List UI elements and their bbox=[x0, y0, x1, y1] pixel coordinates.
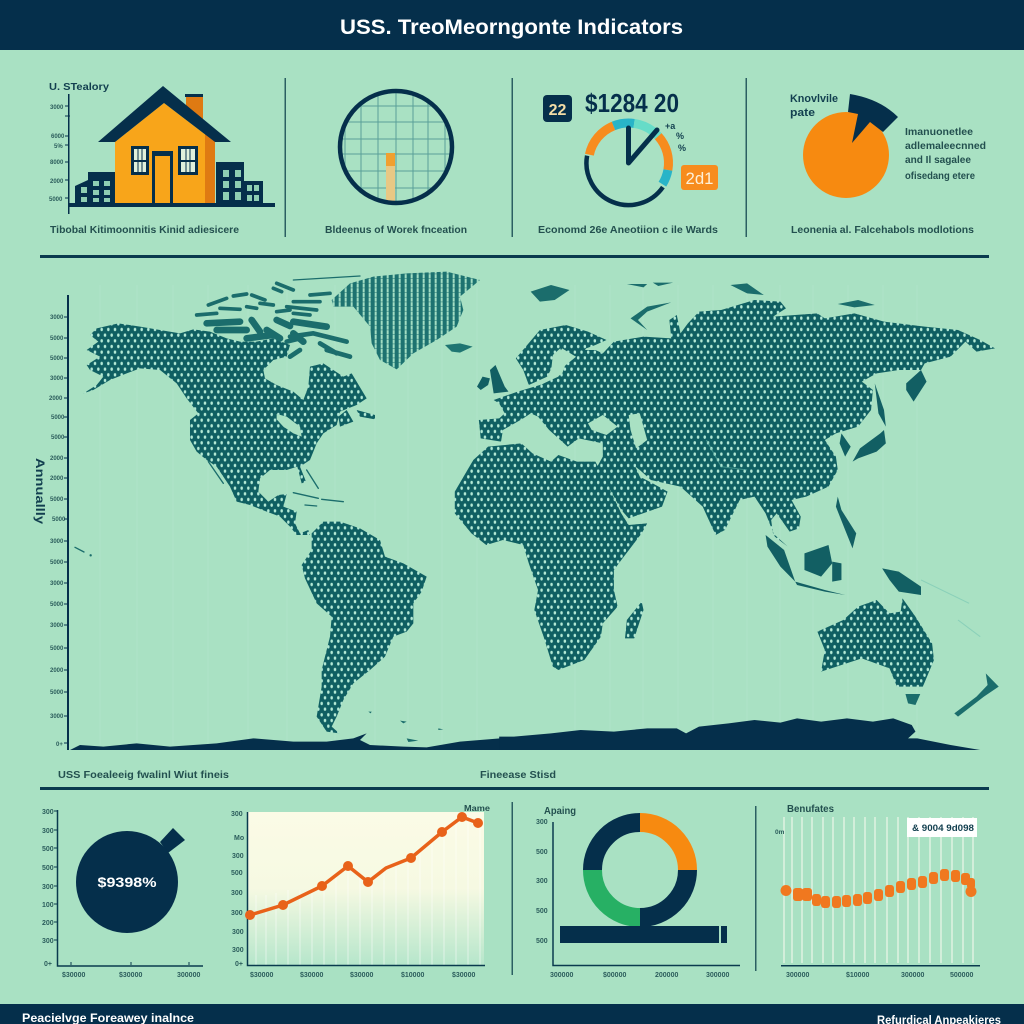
panel: line chart: $30000 bbox=[350, 972, 373, 979]
panel: donut chart bbox=[536, 806, 740, 979]
panel: gauge: 22 bbox=[549, 102, 566, 119]
map caption right: Fineease Stisd bbox=[480, 769, 556, 781]
panel: pie chart: Imanuonetlee bbox=[905, 126, 973, 138]
divider bbox=[512, 802, 513, 975]
panel: dotted trend: & 9004 9d098 bbox=[912, 823, 974, 833]
panel: dotted trend: 300000 bbox=[786, 972, 809, 979]
map axis: 3000 bbox=[50, 581, 64, 587]
panel: dotted trend: 0m bbox=[775, 829, 785, 836]
panel: donut chart: 300 bbox=[536, 878, 548, 885]
Arctic islands bbox=[75, 276, 360, 552]
panel: gauge: $1284 20 bbox=[585, 88, 679, 118]
panel: gauge: 2d1 bbox=[686, 169, 714, 188]
panel: gauge bbox=[543, 88, 718, 205]
map axis: 5000 bbox=[52, 517, 66, 523]
panel: dotted trend bbox=[775, 804, 980, 979]
map axis: 2000 bbox=[50, 476, 64, 482]
panel: circle stat: 300 bbox=[42, 884, 54, 891]
caption: gauge panel: Economd 26e Aneotiion c ile Wards bbox=[538, 224, 718, 236]
panel: dotted trend: $10000 bbox=[846, 972, 869, 979]
panel: gauge: % bbox=[678, 143, 686, 153]
panel: donut chart: 300000 bbox=[550, 972, 573, 979]
map axis: 5000 bbox=[50, 560, 64, 566]
panel: circle stat: $9398% bbox=[98, 874, 157, 890]
Greenland bbox=[332, 272, 480, 369]
panel: donut chart: 300000 bbox=[706, 972, 729, 979]
panel: circle stat: 300000 bbox=[177, 972, 200, 979]
map axis: 2000 bbox=[50, 456, 64, 462]
caption: pie panel: Leonenia al. Falcehabols modlotions bbox=[791, 224, 974, 236]
panel: house indicator bbox=[49, 81, 275, 214]
panel: line chart: 300 bbox=[231, 890, 243, 897]
panel: line chart: $30000 bbox=[250, 972, 273, 979]
panel: line chart: $30000 bbox=[300, 972, 323, 979]
caption: grid panel: Bldeenus of Worek fnceation bbox=[325, 224, 467, 236]
panel: house indicator: 3000 bbox=[50, 105, 64, 111]
panel: house indicator: 5% bbox=[54, 144, 63, 150]
panel: line chart: Mo bbox=[234, 835, 244, 842]
panel: line chart: $10000 bbox=[401, 972, 424, 979]
panel: dotted trend: 300000 bbox=[901, 972, 924, 979]
map axis: 5000 bbox=[51, 435, 65, 441]
Americas, Greenland, Arctic islands bbox=[70, 272, 500, 750]
panel: donut chart: 300 bbox=[536, 819, 548, 826]
panel: pie chart: pate bbox=[790, 107, 815, 119]
panel: dotted trend: Benufates bbox=[787, 804, 834, 815]
map axis: 3000 bbox=[50, 714, 64, 720]
panel: dotted trend: 500000 bbox=[950, 972, 973, 979]
panel: donut chart: 500 bbox=[536, 849, 548, 856]
panel: house indicator: 8000 bbox=[50, 160, 64, 166]
map axis: 3000 bbox=[50, 539, 64, 545]
map axis: 3000 bbox=[50, 376, 64, 382]
panel: circle stat: 500 bbox=[42, 865, 54, 872]
panel: circle stat: $30000 bbox=[119, 972, 142, 979]
panel: pie chart: adlemaleecnned bbox=[905, 140, 986, 152]
panel: donut chart: Apaing bbox=[544, 806, 576, 817]
panel: gauge: +a bbox=[665, 121, 676, 131]
divider bbox=[284, 78, 286, 237]
map axis: 3000 bbox=[50, 623, 64, 629]
Madagascar bbox=[625, 602, 644, 638]
panel: grid circle bbox=[340, 90, 452, 205]
map axis: 5000 bbox=[50, 602, 64, 608]
panel: circle stat bbox=[42, 809, 203, 979]
panel: circle stat: 0+ bbox=[44, 961, 52, 968]
rule bbox=[40, 255, 989, 258]
divider bbox=[746, 78, 747, 237]
panel: line chart bbox=[231, 804, 491, 979]
divider bbox=[755, 806, 756, 971]
header banner bbox=[0, 0, 1024, 50]
panel: line chart: 300 bbox=[232, 947, 244, 954]
Australia bbox=[817, 598, 934, 687]
panel: donut chart: $00000 bbox=[603, 972, 626, 979]
panel: line chart: 300 bbox=[231, 811, 243, 818]
panel: pie chart bbox=[790, 93, 986, 198]
panel: line chart: 500 bbox=[231, 870, 243, 877]
panel: donut chart: 500 bbox=[536, 938, 548, 945]
panel: line chart: Mame bbox=[464, 804, 491, 813]
map caption left: USS Foealeeig fwalinl Wiut fineis bbox=[58, 769, 229, 781]
divider bbox=[512, 78, 513, 237]
panel: donut chart: 200000 bbox=[655, 972, 678, 979]
map axis: 5000 bbox=[50, 690, 64, 696]
map axis: 5000 bbox=[50, 497, 64, 503]
panel: house indicator: 2000 bbox=[50, 179, 64, 185]
panel: line chart: 300 bbox=[232, 929, 244, 936]
map axis: 2000 bbox=[50, 668, 64, 674]
panel: house indicator: 5000 bbox=[49, 197, 63, 203]
map axis: 0+ bbox=[56, 742, 63, 748]
panel: pie chart: ofisedang etere bbox=[905, 170, 975, 182]
panel: line chart: 0+ bbox=[235, 961, 243, 968]
map axis: 2000 bbox=[49, 396, 63, 402]
Eurasia, Africa, Oceania bbox=[455, 283, 999, 750]
panel: line chart: 300 bbox=[232, 853, 244, 860]
Asian islands bbox=[766, 370, 927, 595]
header banner: USS. TreoMeorngonte Indicators bbox=[340, 16, 683, 39]
map axis: 5000 bbox=[50, 336, 64, 342]
caption: house panel: Tibobal Kitimoonnitis Kinid adiesicere bbox=[50, 224, 239, 236]
panel: line chart: $30000 bbox=[452, 972, 475, 979]
South America bbox=[302, 522, 427, 733]
panel: donut chart: 500 bbox=[536, 908, 548, 915]
inland seas bbox=[541, 348, 647, 448]
map axis: Annuallly bbox=[33, 458, 47, 524]
Antarctica east bbox=[499, 718, 980, 750]
panel: house indicator: 6000 bbox=[51, 134, 65, 140]
icon: city buildings bbox=[75, 162, 263, 204]
panel: circle stat: $30000 bbox=[62, 972, 85, 979]
panel: house indicator: U. STealory bbox=[49, 81, 109, 93]
map axis: 5000 bbox=[51, 415, 65, 421]
British Isles bbox=[477, 365, 508, 393]
gauge ring bbox=[586, 123, 669, 205]
panel: circle stat: 300 bbox=[42, 809, 54, 816]
panel: pie chart: Knovlvile bbox=[790, 93, 838, 105]
map axis: 5000 bbox=[50, 356, 64, 362]
panel: pie chart: and Il sagalee bbox=[905, 154, 971, 166]
panel: gauge: % bbox=[676, 131, 684, 141]
panel: circle stat: 500 bbox=[42, 846, 54, 853]
rule bbox=[40, 787, 989, 790]
Africa bbox=[455, 443, 647, 670]
footer band bbox=[0, 1004, 1024, 1024]
map axis: 5000 bbox=[50, 646, 64, 652]
icon: house bbox=[98, 86, 231, 203]
Eurasia bbox=[479, 300, 995, 547]
North America bbox=[83, 323, 367, 535]
panel: circle stat: 100 bbox=[42, 902, 54, 909]
panel: circle stat: 300 bbox=[42, 828, 54, 835]
panel: circle stat: 300 bbox=[42, 938, 54, 945]
map axis: 3000 bbox=[50, 315, 64, 321]
map axis bbox=[33, 295, 69, 750]
Antarctica west bbox=[70, 733, 500, 750]
Scandinavia bbox=[516, 325, 606, 385]
world map bbox=[70, 272, 999, 750]
panel: circle stat: 200 bbox=[42, 920, 54, 927]
panel: line chart: 300 bbox=[231, 910, 243, 917]
